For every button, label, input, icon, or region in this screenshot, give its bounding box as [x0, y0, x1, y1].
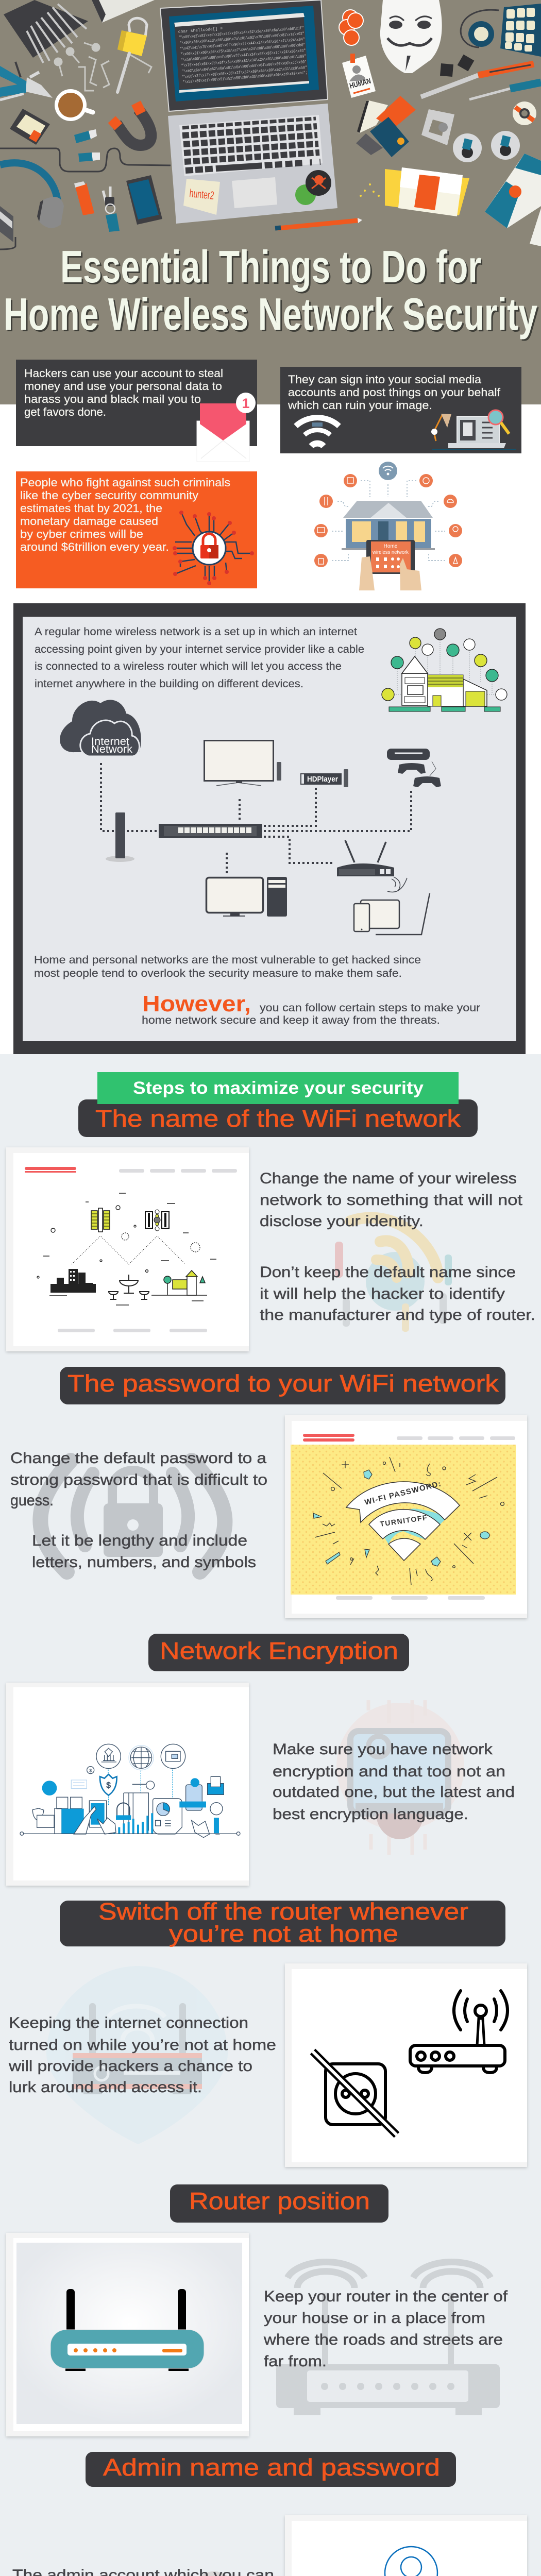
panel: people who fight against criminals: like the cyber security community [20, 489, 198, 502]
text: change the default password: Change the default password to a [10, 1450, 266, 1467]
icon: pliers [0, 62, 53, 100]
code listing on screen: "\xe2\x6a\x04\x52\x6a\x01\x6a\x00\xb8\x04\x00\x00\x00\xcd\x80" [181, 60, 307, 74]
text: keeping the internet on: will provide hackers a chance to [8, 2058, 252, 2075]
text: vulnerable networks: Home and personal networks are the most vulnerable to get hacked since [34, 954, 421, 966]
icon: desktop computer [206, 877, 287, 917]
icon: satellites [91, 1208, 169, 1232]
text: however callout: you can follow certain steps to make your [260, 1002, 480, 1014]
section heading: the name of the WiFi network [78, 1099, 478, 1137]
section heading: the name of the WiFi network: The name of the WiFi network [95, 1105, 461, 1132]
laptop cable [0, 148, 171, 172]
icon: microchips [440, 55, 474, 77]
hands [359, 556, 375, 590]
text: keep your router in the center: where the roads and streets are [263, 2331, 503, 2348]
code listing on screen: "\x52\x89\xe1\x50\x51\x52\x50\xb8\x3b\x00\x00\x00\xcd\x80\xcc"; [182, 71, 308, 85]
text: change the name: Don’t keep the default name since [260, 1264, 516, 1281]
card: satellite illustration [6, 1147, 249, 1351]
watermark: wifi lock [40, 1461, 225, 1572]
icon: envelope with notification: 1 [242, 396, 250, 411]
icon: energy drink cans [485, 154, 541, 246]
text: change the default password: strong password that is difficult to [10, 1471, 267, 1488]
icon: cable and speaker [461, 10, 499, 47]
icon: smartphone [126, 175, 162, 225]
panel: hackers can use your account [16, 360, 257, 462]
section heading: the password to your WiFi network: The password to your WiFi network [67, 1370, 499, 1397]
icon: headphones [0, 163, 64, 249]
icon: wireless router [337, 840, 394, 876]
text: however callout: However, [142, 991, 251, 1016]
text: keeping the internet on: lurk around and access it. [9, 2079, 202, 2096]
icon: calculator [10, 109, 50, 145]
icon: HD player [300, 769, 348, 787]
skull sticker [306, 170, 331, 196]
panel: people who fight against criminals: estimates that by 2021, the [20, 502, 162, 515]
icon: duct tape roll [513, 101, 536, 125]
icon: tablet phone and laptop [354, 893, 430, 935]
smart device badges [314, 462, 462, 567]
icon: wifi password ribbon [346, 1480, 460, 1561]
section heading: router position [170, 2184, 388, 2223]
section heading: switch off the router [60, 1898, 505, 1947]
watermark: person at router desk [12, 2571, 264, 2576]
icon: pill bottle [360, 167, 469, 216]
panel: regular home wireless network frame [13, 603, 526, 1054]
icon: city skyline [50, 1269, 96, 1293]
icon: keypad [500, 4, 541, 57]
confetti doodles [315, 1457, 497, 1585]
watermark: grey router with wifi [276, 2262, 500, 2415]
text: keeping the internet on: turned on while you’re not at home [9, 2037, 276, 2054]
illustration: smart home wireless network [314, 462, 462, 590]
text: network description: A regular home wireless network is a set up in which an internet [35, 626, 357, 638]
text: keeping the internet on [8, 2014, 276, 2096]
text: change the name: Change the name of your wireless [260, 1170, 517, 1187]
section heading: router position: Router position [189, 2188, 370, 2214]
panel: sign into your social media: accounts and post things on your behalf [288, 386, 501, 399]
text: change the name: it will help the hacker to identify [260, 1285, 505, 1302]
diagram: dotted network wires [101, 763, 411, 875]
icon: internet cloud: Internet [91, 736, 129, 748]
banner: steps to maximize your security: Steps to maximize your security [133, 1078, 424, 1098]
code listing on screen: "\x75\xee\x68\x0b\x6f\x6b\x0b\x81\x34\x24\x01\x00\x00\x01\x89" [181, 54, 307, 69]
icon: orange pencil [275, 218, 362, 228]
icon: USB sticks [74, 129, 100, 162]
icon: router [50, 2289, 204, 2371]
banner: steps to maximize your security [97, 1072, 459, 1104]
text: keep your router in the center: your house or in a place from [264, 2310, 485, 2327]
text: vulnerable networks [34, 954, 421, 979]
text: keep your router in the center [263, 2288, 508, 2370]
icon: internet cloud: Network [91, 743, 133, 755]
icon: handheld device [421, 109, 454, 145]
header panel: hacker desk flat lay [0, 0, 541, 404]
panel: hackers can use your account: money and use your personal data to [24, 380, 222, 393]
panel: people who fight against criminals: around $6trillion every year. [20, 540, 169, 553]
icon: open yellow padlock [117, 18, 147, 92]
icon: small house and trees [151, 1270, 207, 1295]
text: network description: accessing point given by your internet service provider like a cable [35, 643, 364, 655]
icon: modem [106, 812, 134, 862]
icon: keys and allen wrenches [55, 43, 151, 91]
icon: unplugged wall socket [313, 2052, 397, 2135]
card: encryption line illustration [6, 1683, 249, 1886]
icon: wifi password ribbon: TURNITOFF [379, 1513, 428, 1528]
text: however callout [142, 991, 480, 1026]
sticky note with password: hunter2 [189, 187, 215, 202]
icon: ID badge: HUMAN [349, 77, 372, 91]
text: change the default password: letters, numbers, and symbols [32, 1554, 256, 1571]
icon: laptop screen [160, 0, 328, 111]
icon: lighter [74, 181, 94, 215]
scattered doodles [37, 1193, 216, 1305]
watermark: circuit padlock [336, 1700, 464, 1855]
icon: television [204, 741, 281, 786]
house [343, 501, 433, 518]
panel: hackers can use your account: Hackers can use your account to steal [24, 367, 223, 380]
icon: stacked cans [453, 131, 520, 162]
icon: credit cards [356, 96, 416, 157]
text: make sure network encryption: outdated one, but the latest and [273, 1784, 515, 1801]
text: change the name [260, 1170, 535, 1324]
code listing on screen: "\x68\x2f\x73\x68\x00\x68\x2f\x62\x69\x6e\x89\xe2\x31\xc0\x50" [182, 65, 307, 80]
illustration: smart home wireless network: wireless network [372, 550, 409, 555]
watermark: router in shield [46, 1966, 228, 2144]
text: make sure network encryption: Make sure you have network [273, 1741, 493, 1758]
icon: key fob [103, 187, 120, 232]
text: network description: internet anywhere in the building on different devices. [35, 678, 303, 690]
icon: satellite dishes [109, 1275, 149, 1299]
panel: sign into your social media: which can ruin your image. [288, 399, 432, 412]
white upper section [0, 404, 541, 1054]
section heading: switch off the router: you’re not at home [169, 1920, 398, 1947]
text: network description: is connected to a wireless router which will let you access the [35, 660, 342, 672]
code listing on screen [178, 20, 308, 85]
icon: envelope with notification [197, 393, 256, 462]
icon: soldering iron [421, 64, 534, 97]
icon: wifi waves [387, 877, 407, 892]
illustration: security icons: $ [106, 1781, 111, 1790]
panel: people who fight against criminals: People who fight against such criminals [20, 476, 230, 489]
icon: screwdriver [469, 82, 541, 99]
text: change the default password: Let it be lengthy and include [32, 1532, 247, 1549]
icon: user avatar [385, 2547, 437, 2576]
panel: hackers can use your account: harass you and black mail you to [24, 393, 201, 405]
panel: people who fight against criminals: monetary damage caused [20, 515, 158, 528]
icon: anonymous mask [380, 0, 442, 73]
text: change the default password: guess. [10, 1492, 54, 1509]
text: vulnerable networks: most people tend to overlook the security measure to make them safe. [34, 968, 402, 979]
tablet [366, 540, 415, 574]
text: network description [35, 626, 364, 690]
card: login form [285, 2515, 527, 2576]
icon: coffee cup [55, 89, 93, 121]
panel: people who fight against criminals [16, 471, 257, 588]
green sticker [295, 184, 316, 205]
text: change the name: network to something that will not [260, 1192, 523, 1209]
text: change the name: the manufacturer and type of router. [260, 1307, 535, 1324]
dotted connectors [332, 481, 445, 561]
section heading: the password to your WiFi network [60, 1367, 505, 1404]
card: wifi password [285, 1415, 527, 1618]
code listing on screen: char shellcode[] = [178, 26, 223, 35]
icon: bitcoin coins [339, 10, 363, 45]
text: change the name: disclose your identity. [260, 1213, 424, 1230]
icon: HD player: HDPlayer [307, 775, 338, 784]
signal dotted lines [72, 1236, 185, 1264]
text: however callout: home network secure and keep it away from the threats. [142, 1014, 440, 1026]
title [4, 241, 537, 340]
section heading: switch off the router: Switch off the router whenever [98, 1898, 468, 1925]
text: change the default password [10, 1450, 267, 1571]
illustration: smart house with pins [382, 629, 507, 711]
panel: people who fight against criminals: by cyber crimes will be [20, 528, 143, 540]
icon: wifi with spider [296, 418, 339, 446]
illustration: smart home wireless network: Home [384, 544, 398, 549]
code listing on screen: "\x89\xe2\x83\xec\x10\x6a\x10\x54\x52\x6a\x00\x6a\x00\xb8\x1f" [179, 26, 304, 40]
text: make sure network encryption: encryption and that too not an [273, 1763, 505, 1780]
text: make sure network encryption [273, 1741, 515, 1823]
card: teal router [6, 2233, 249, 2436]
text: keeping the internet on: Keeping the internet connection [9, 2014, 248, 2031]
text: keep your router in the center: far from. [264, 2353, 327, 2370]
text: keep your router in the center: Keep your router in the center of [264, 2288, 508, 2305]
icon: laptop base with keyboard [168, 104, 337, 224]
section heading: network encryption [148, 1634, 409, 1671]
icon: saw [92, 0, 155, 23]
panel: sign into your social media: They can sign into your social media [288, 373, 482, 386]
panel: hackers can use your account: get favors done. [24, 405, 106, 418]
illustration: security icons: $ [89, 1768, 92, 1773]
code listing on screen: "\x00\x00\x00\xcd\x80\x89\x7a\x01\x02\x75\x00\x66\x81\x7a\x02" [179, 31, 305, 46]
icon: horseshoe magnet [112, 103, 151, 145]
icon: circuit padlock [173, 511, 254, 585]
section heading: admin name and password [86, 2452, 456, 2487]
code listing on screen: "\x42\x41\x75\x03\xeb\x0f\x90\xff\x44\x24\x04\x81\x7c\x24\x04" [180, 37, 305, 52]
sticky note with password [183, 179, 220, 215]
section heading: network encryption: Network Encryption [160, 1637, 398, 1664]
code listing on screen: "\x5a\x00\x00\x00\xcd\x80\xff\x44\x24\x08\x83\x7c\x24\x08\x03" [181, 48, 306, 63]
icon: desk lamp and laptop profile [431, 410, 516, 449]
icon: lock pick kit [4, 0, 88, 63]
illustration: security icons [20, 1744, 240, 1838]
section heading: admin name and password: Admin name and password [103, 2454, 440, 2481]
text: make sure network encryption: best encryption language. [273, 1806, 468, 1823]
code listing on screen: "\x00\x01\x00\x00\x75\xda\xc7\x44\x24\x08\x00\x00\x00\x00\xb0" [180, 43, 306, 57]
panel: sign into your social media [280, 367, 521, 453]
icon: router with antenna [410, 1991, 508, 2073]
watermark: wifi globe with people [335, 1217, 452, 1332]
trackpad [232, 177, 277, 208]
icon: wifi password ribbon: WI-FI PASSWORD: [364, 1480, 442, 1507]
icon: game console and controllers [387, 749, 441, 787]
icon: network switch [159, 824, 262, 838]
icon: ID badge [342, 54, 376, 98]
card: router and unplugged socket [285, 1963, 527, 2167]
icon: internet cloud [60, 700, 141, 756]
